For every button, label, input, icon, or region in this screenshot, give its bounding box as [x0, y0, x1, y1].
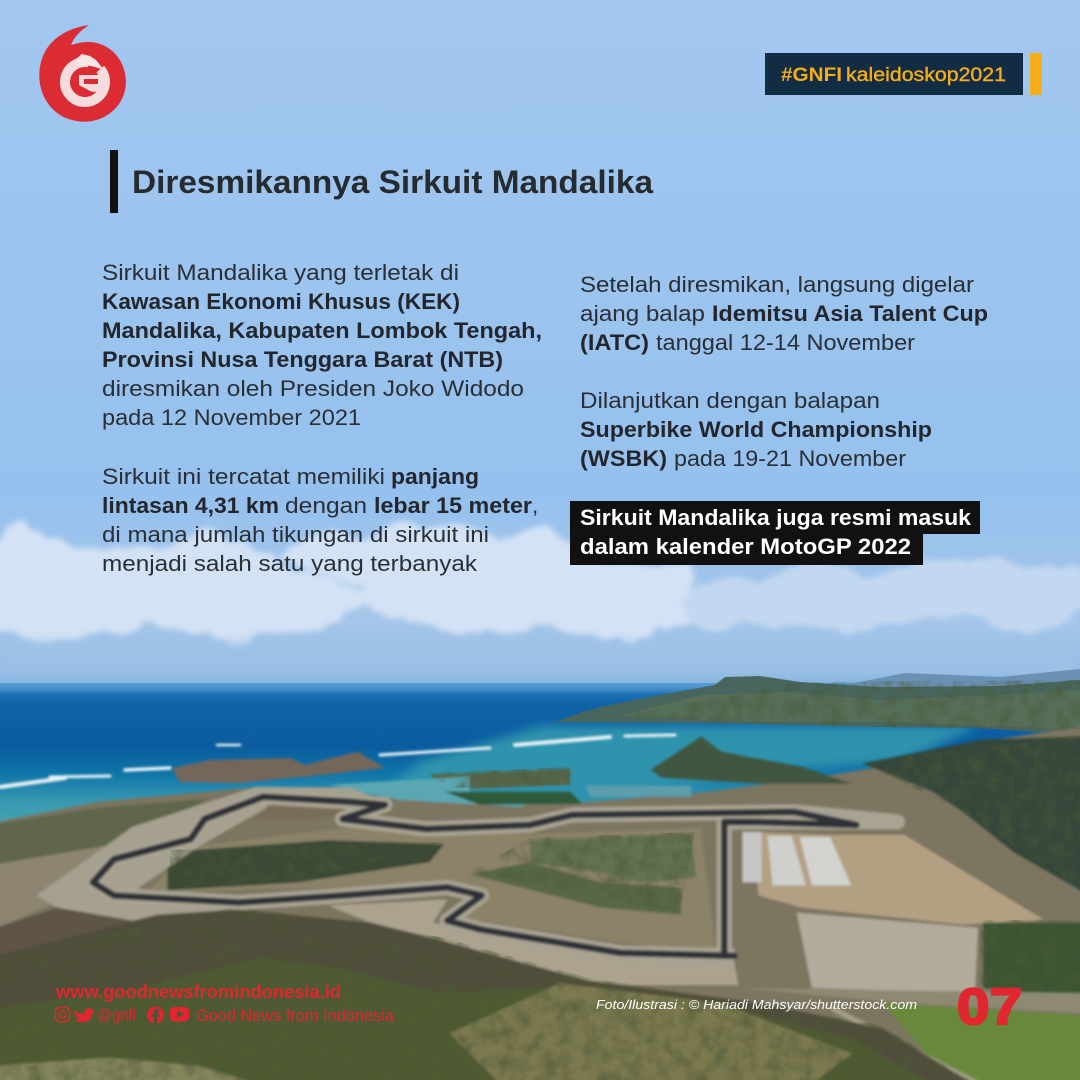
hashtag text [781, 64, 1006, 86]
text block: paragraph 3: tanggal 12-14 November [656, 330, 916, 355]
text block: paragraph 3: Idemitsu Asia Talent Cup [712, 301, 988, 326]
sky [0, 0, 1080, 690]
text block: paragraph 1: pada 12 November 2021 [102, 405, 361, 430]
icon: facebook [147, 1006, 164, 1024]
construction yard [797, 913, 978, 993]
text block: paragraph 3 [580, 272, 988, 355]
callout: MotoGP 2022 [570, 501, 980, 565]
vegetation texture [0, 680, 1080, 1080]
footer: website and social links [55, 982, 395, 1025]
icon: instagram [56, 1008, 70, 1022]
foreground hills [0, 910, 973, 1080]
icon: youtube [170, 1007, 189, 1022]
road [832, 1008, 978, 1080]
sea [0, 683, 1080, 833]
page number: 07 [957, 978, 1022, 1035]
handle: @gnfi [97, 1007, 136, 1024]
track runoff [93, 797, 897, 956]
text block: paragraph 1: Sirkuit Mandalika yang terletak di [102, 260, 459, 285]
west quarry [0, 842, 127, 928]
headland [555, 676, 1080, 735]
inland lagoon [585, 786, 691, 797]
text block: paragraph 2: lintasan 4,31 km [102, 493, 279, 518]
text block: paragraph 2 [102, 464, 538, 576]
text block: paragraph 2: di mana jumlah tikungan di sirkuit ini [102, 522, 489, 547]
pale runoff area [329, 899, 738, 985]
text block: paragraph 2: lebar 15 meter [374, 493, 532, 518]
infield forest [167, 840, 444, 890]
west runoff [37, 787, 387, 923]
logo white ring [57, 54, 113, 110]
text block: paragraph 3: Setelah diresmikan, langsung digelar [580, 272, 975, 297]
forest east [862, 736, 1080, 892]
south-west dirt [0, 908, 167, 958]
hashtag text: #GNFI [781, 64, 842, 86]
infield ground [147, 827, 716, 953]
text block: paragraph 2: , [532, 493, 538, 518]
logo: GNFI red swirl with garuda G [39, 25, 126, 122]
distant hills [850, 669, 1080, 700]
text block: paragraph 3: (IATC) [580, 330, 649, 355]
text block: paragraph 4: Superbike World Championship [580, 417, 932, 442]
rocky islets [172, 752, 385, 783]
text block: paragraph 3: ajang balap [580, 301, 705, 326]
logo red shape [39, 25, 126, 122]
text block: paragraph 4: pada 19-21 November [674, 446, 907, 471]
text block: paragraph 1: Kawasan Ekonomi Khusus (KEK) [102, 289, 460, 314]
text block: paragraph 2: panjang [391, 464, 479, 489]
south-east strip [741, 988, 1080, 1013]
circuit asphalt [93, 797, 856, 956]
facebook and youtube page name: Good News from Indonesia [196, 1006, 395, 1025]
text block: paragraph 2: dengan [285, 493, 367, 518]
callout text: Sirkuit Mandalika juga resmi masuk [580, 505, 971, 530]
north hill in circuit [253, 795, 349, 820]
infield scrub [530, 834, 696, 882]
pointed hill [651, 736, 852, 784]
paddock dirt [751, 832, 1044, 925]
text block: paragraph 1: diresmikan oleh Presiden Joko Widodo [102, 376, 524, 401]
pit buildings [742, 832, 851, 885]
title bar [110, 150, 118, 213]
green field right [983, 923, 1080, 998]
title [110, 150, 653, 213]
text block: paragraph 4: Dilanjutkan dengan balapan [580, 388, 880, 413]
badge background [765, 53, 1023, 95]
clouds [0, 530, 1080, 685]
icon: twitter [74, 1008, 95, 1022]
bay water [380, 726, 980, 800]
hashtag badge [765, 53, 1042, 95]
text block: paragraph 1: Mandalika, Kabupaten Lombok Tengah, [102, 318, 542, 343]
text block: paragraph 4 [580, 388, 932, 471]
lagoon [329, 777, 560, 807]
text block: paragraph 1 [102, 260, 542, 430]
surf [0, 735, 675, 787]
text block: paragraph 1: Provinsi Nusa Tenggara Barat (NTB) [102, 347, 503, 372]
horizon haze [0, 678, 1080, 688]
callout background [570, 501, 980, 565]
photo credit: Foto/Ilustrasi : © Hariadi Mahsyar/shutterstock.com [596, 997, 917, 1012]
resort palm grove [429, 769, 570, 790]
text block: paragraph 4: (WSBK) [580, 446, 667, 471]
land mass [0, 726, 1080, 1080]
yellow accent bar [1030, 53, 1042, 95]
text block: paragraph 2: Sirkuit ini tercatat memiliki [102, 464, 385, 489]
mangrove [444, 792, 582, 805]
hashtag text: kaleidoskop2021 [846, 64, 1006, 86]
callout text: dalam kalender MotoGP 2022 [580, 534, 911, 559]
title text: Diresmikannya Sirkuit Mandalika [132, 164, 653, 200]
text block: paragraph 2: menjadi salah satu yang terbanyak [102, 551, 478, 576]
land and circuit grounds [0, 726, 1080, 1080]
website url: www.goodnewsfromindonesia.id [55, 982, 341, 1002]
callout text [580, 505, 971, 559]
